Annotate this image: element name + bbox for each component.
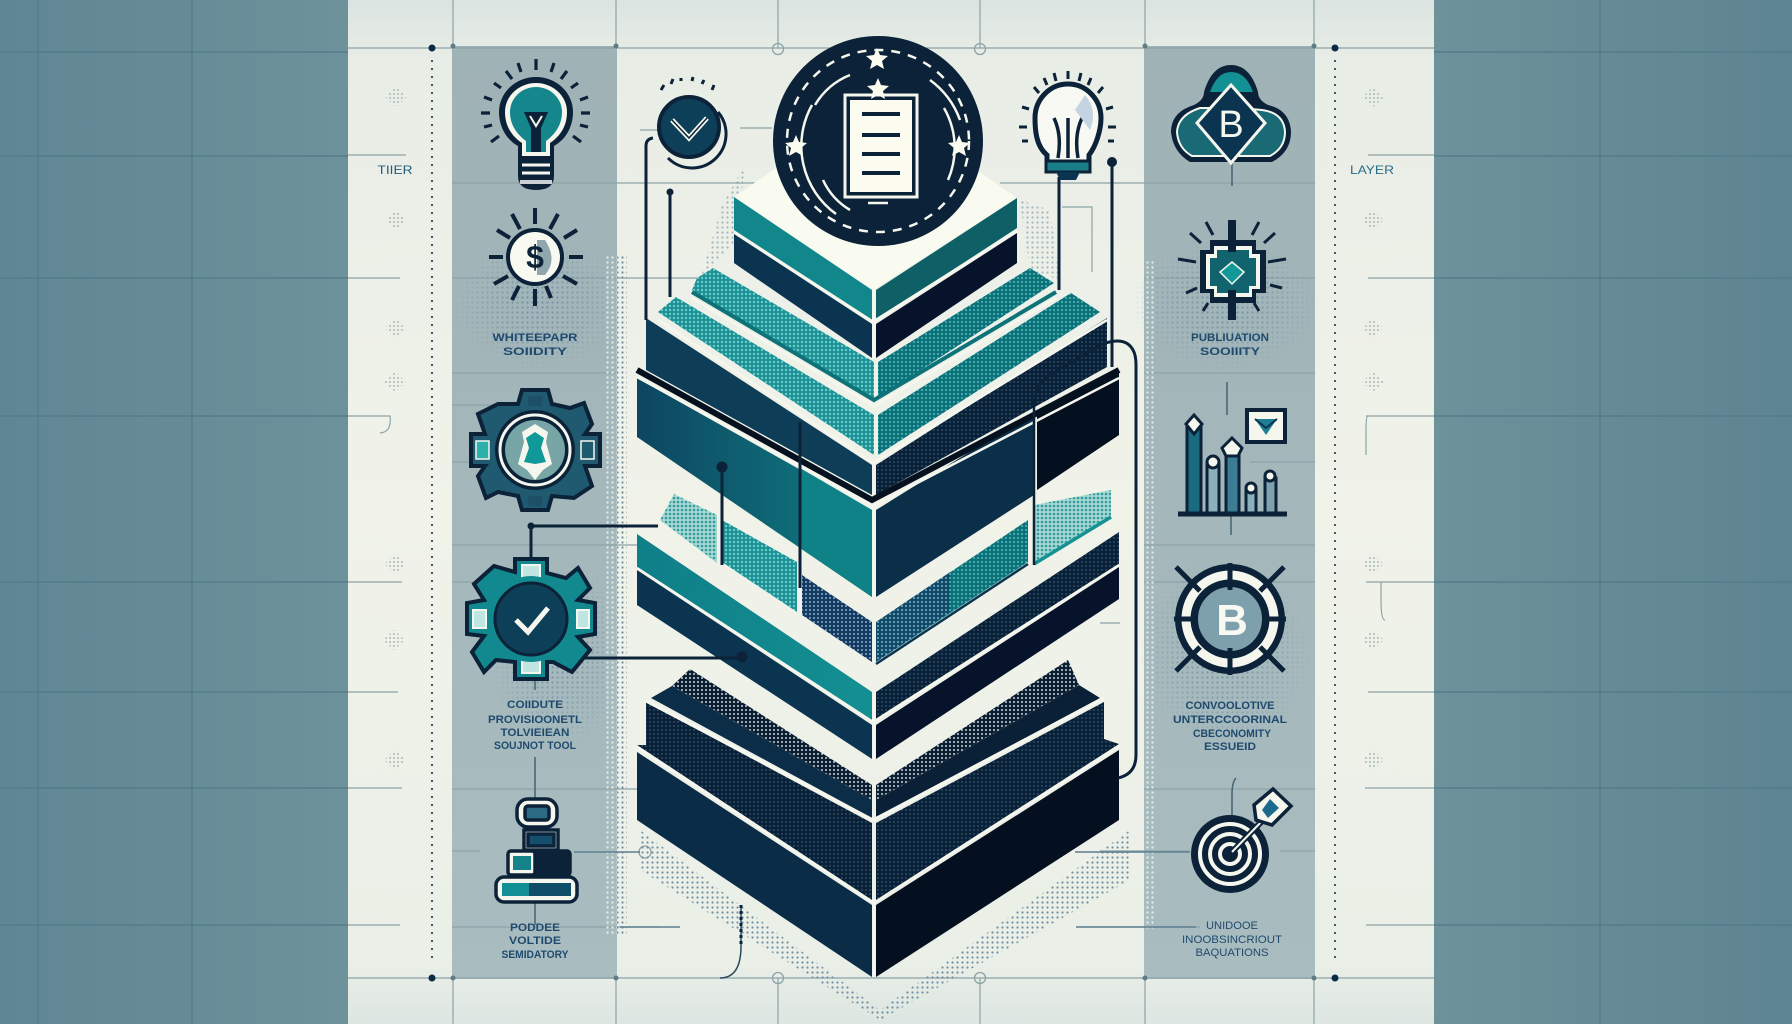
label: layer: LAYER <box>1350 163 1394 177</box>
caption: compute provisional: COIIDUTE <box>507 699 563 711</box>
icon: bitcoin ring <box>1174 563 1286 675</box>
caption: unidooe <box>1182 920 1282 959</box>
diamond marks on side margins <box>383 87 1384 770</box>
stack layer: dark halftone navy tier <box>637 660 1119 900</box>
caption: compute provisional: TOLVIEIEAN <box>500 727 570 739</box>
cream central page <box>348 0 1434 1024</box>
icon: check badge <box>659 77 726 168</box>
icon: stacked blocks <box>496 799 577 902</box>
stack layer: top block <box>734 100 1017 358</box>
caption: poddee: SEMIDATORY <box>502 949 569 961</box>
icon: gear with shield <box>471 390 600 510</box>
icon: bitcoin ring: B <box>1216 596 1248 645</box>
layout grid lines <box>348 0 1434 1024</box>
stack layer: teal dotted strips <box>658 268 1100 455</box>
caption: convolutive: UNTERCCOORINAL <box>1173 714 1287 726</box>
stack layer: dotted segmented tier <box>660 490 1111 664</box>
stack layer: segmented teal and navy block <box>637 318 1119 597</box>
caption: compute provisional: PROVISIOONETL <box>488 714 582 726</box>
label: tier: TIIER <box>378 163 413 177</box>
caption: unidooe: BAQUATIONS <box>1196 947 1268 959</box>
caption: publication <box>1191 332 1269 358</box>
caption: whitepaper: WHITEEPAPR <box>492 332 578 344</box>
caption: poddee: PODDEE <box>510 922 560 934</box>
connector lines <box>528 138 1236 978</box>
icon: gear with check <box>467 559 595 679</box>
icon: outline light bulb <box>1019 71 1116 180</box>
grey side column left <box>452 46 617 979</box>
icon: coin with rays <box>489 208 583 306</box>
caption: compute provisional <box>488 699 582 752</box>
grey side column right <box>1144 46 1315 979</box>
emblem: clipboard in dark circle <box>773 36 983 246</box>
caption: convolutive: ESSUEID <box>1204 741 1256 753</box>
caption: unidooe: INOOBSINCRIOUT <box>1182 934 1282 946</box>
caption: poddee <box>502 922 569 961</box>
caption: whitepaper: SOIIDITY <box>503 346 568 358</box>
caption: publication: SOOIIITY <box>1200 346 1261 358</box>
icon: coin with rays: $ <box>526 239 544 275</box>
registration dots and rings <box>428 44 1338 984</box>
caption: convolutive <box>1173 700 1287 753</box>
caption: convolutive: CONVOOLOTIVE <box>1186 700 1274 712</box>
halftone shading patches <box>452 165 1320 1020</box>
caption: compute provisional: SOUJNOT TOOL <box>494 740 576 752</box>
icon: sun chip <box>1178 220 1286 320</box>
stack layer: bottom navy block <box>637 746 1119 977</box>
icon: cloud with B: B <box>1218 104 1244 146</box>
caption: unidooe: UNIDOOE <box>1206 920 1258 932</box>
icon: bar chart with box <box>1178 410 1287 514</box>
caption: whitepaper <box>492 332 578 358</box>
caption: poddee: VOLTIDE <box>509 935 561 947</box>
caption: convolutive: CBECONOMITY <box>1193 728 1272 740</box>
caption: publication: PUBLIUATION <box>1191 332 1269 344</box>
icon: target with dart <box>1191 789 1291 893</box>
icon: cloud with B <box>1171 65 1291 163</box>
stack layer: teal and navy tier <box>637 532 1119 759</box>
icon: teal light bulb <box>481 59 590 190</box>
